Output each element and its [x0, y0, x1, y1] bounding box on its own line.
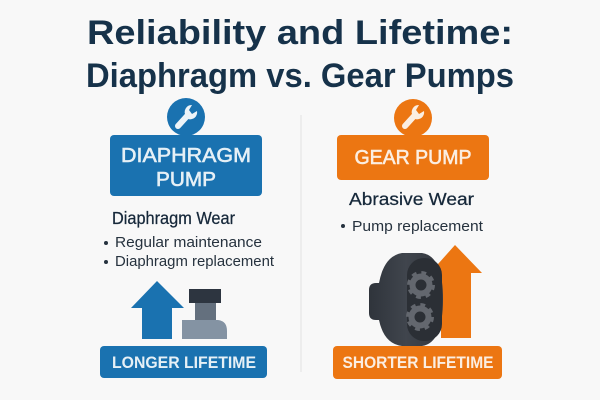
title: Diaphragm vs. Gear Pumps: [86, 57, 514, 95]
bullet list: gear pump: Pump replacement: [352, 219, 483, 235]
heading badge: diaphragm pump: DIAPHRAGM: [121, 144, 251, 167]
badge: shorter lifetime: SHORTER LIFETIME: [342, 354, 494, 372]
icon: diaphragm pump: [182, 289, 227, 339]
gears: [408, 274, 432, 328]
subheading: abrasive wear: Abrasive Wear: [349, 189, 474, 209]
icon: blue up arrow: [131, 281, 184, 339]
subheading: diaphragm wear: Diaphragm Wear: [112, 208, 235, 228]
icon: gear pump: [369, 253, 443, 346]
icon: orange up arrow: [430, 245, 482, 338]
heading badge: diaphragm pump: [110, 135, 262, 196]
badge: shorter lifetime: [333, 346, 502, 379]
badge: longer lifetime: LONGER LIFETIME: [112, 354, 256, 372]
icon: blue wrench: [167, 98, 205, 136]
bullet list: diaphragm: Regular maintenance: [115, 235, 262, 251]
panel: diaphragm pump: [100, 98, 274, 378]
bullet list: diaphragm: [104, 235, 274, 270]
badge: longer lifetime: [100, 346, 267, 378]
heading badge: gear pump: GEAR PUMP: [354, 146, 472, 169]
icon: orange wrench: [394, 99, 432, 137]
panel: gear pump: [333, 99, 502, 379]
title: Reliability and Lifetime:: [87, 14, 513, 52]
title: [86, 14, 514, 95]
bullet list: diaphragm: Diaphragm replacement: [115, 254, 274, 270]
heading badge: gear pump: [337, 135, 489, 180]
heading badge: diaphragm pump: PUMP: [156, 168, 216, 191]
